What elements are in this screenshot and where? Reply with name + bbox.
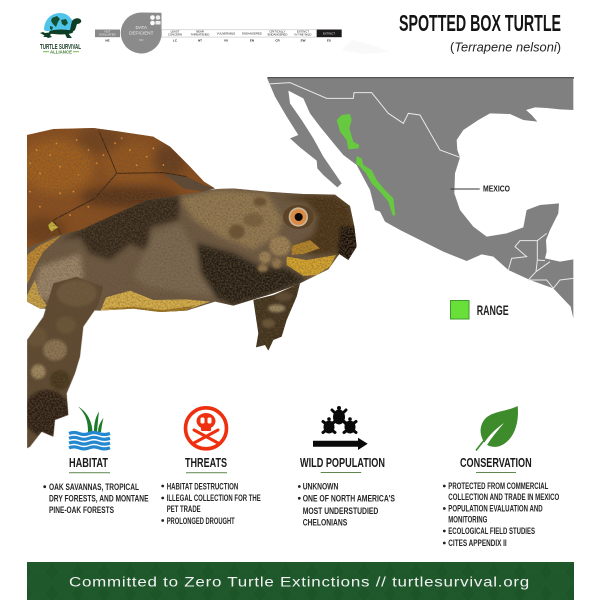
habitat text: PINE-OAK FORESTS [49, 505, 114, 515]
label: Mexico: MEXICO [483, 184, 510, 194]
conservation text: ECOLOGICAL FIELD STUDIES [448, 526, 535, 536]
wild population text: MOST UNDERSTUDIED [303, 506, 379, 516]
heading: HABITAT [69, 455, 108, 470]
status codes: EX [327, 38, 331, 42]
shell [27, 128, 215, 248]
habitat text [43, 482, 148, 515]
footer banner [27, 562, 574, 600]
status: data deficient circle: DEFICIENT [129, 30, 154, 36]
wild population text [298, 482, 395, 528]
threats text [161, 482, 261, 526]
land [267, 79, 573, 318]
heading: CONSERVATION [460, 455, 532, 470]
status codes: VU [224, 38, 228, 42]
icon: turtle with globe shell [40, 13, 81, 38]
habitat text: OAK SAVANNAS, TROPICAL [49, 482, 139, 492]
threats text: PET TRADE [167, 504, 201, 514]
status bar [95, 30, 342, 37]
status: data deficient circle [121, 12, 162, 53]
wild population text: UNKNOWN [303, 482, 338, 492]
status codes: CR [275, 38, 280, 42]
habitat text: DRY FORESTS, AND MONTANE [49, 494, 148, 504]
footer banner: Committed to Zero Turtle Extinctions // turtlesurvival.org [69, 574, 530, 590]
conservation text: PROTECTED FROM COMMERCIAL [448, 481, 549, 491]
yellow jaw [287, 255, 336, 276]
status labels: NEAR [196, 30, 204, 34]
status codes: LC [173, 38, 178, 42]
icon: skull and crossbones [186, 408, 226, 449]
neck scale blobs [229, 197, 291, 272]
plastron [100, 291, 210, 313]
status codes [105, 38, 331, 42]
conservation text: MONITORING [448, 514, 487, 524]
IUCN conservation status scale [95, 12, 342, 53]
status labels: EXTINCT [297, 30, 309, 34]
conservation text: POPULATION EVALUATION AND [448, 504, 543, 514]
status: data deficient circle: DD [139, 38, 144, 42]
scientific name: (Terrapene nelsoni) [450, 40, 561, 54]
shell scute lines [53, 130, 187, 235]
turtle photo illustration [20, 120, 370, 450]
status labels: IN THE WILD [295, 33, 311, 37]
icon: turtles and arrow [313, 406, 368, 450]
status labels: THREATENED [191, 33, 209, 37]
label: Mexico [451, 184, 510, 194]
legend: range: RANGE [477, 302, 509, 318]
turtle eye [283, 205, 314, 229]
section: habitat [43, 406, 148, 515]
status codes: NT [198, 38, 202, 42]
status labels: NOT [105, 30, 111, 34]
beak [338, 227, 357, 261]
status codes: EN [250, 38, 254, 42]
status codes: NE [105, 38, 110, 42]
logo: Turtle Survival Alliance [40, 13, 81, 54]
shell spots [29, 137, 164, 216]
wild population text: ONE OF NORTH AMERICA'S [303, 493, 395, 503]
section: wild population [298, 406, 395, 528]
threats text: ILLEGAL COLLECTION FOR THE [167, 493, 261, 503]
conservation text [443, 481, 559, 548]
icon: leaf [476, 406, 518, 450]
status labels [99, 30, 335, 37]
status labels: VULNERABLE [217, 32, 235, 36]
heading: WILD POPULATION [300, 455, 385, 470]
status labels: LEAST [171, 30, 180, 34]
logo wordmark: TURTLE SURVIVAL [40, 42, 81, 51]
turtle body, neck and head [27, 188, 357, 312]
large front leg [27, 276, 103, 448]
small front leg [254, 284, 300, 350]
status labels: EVALUATED [99, 33, 116, 37]
top rule [267, 77, 574, 79]
status labels: CRITICALLY [270, 30, 286, 34]
country borders [267, 83, 573, 288]
range: spotted box turtle [337, 114, 395, 215]
status labels: CONCERN [168, 33, 182, 37]
legend: range [450, 300, 509, 319]
icon: grass and water [69, 406, 110, 449]
section: conservation [443, 406, 559, 548]
threats text: PROLONGED DROUGHT [167, 516, 235, 526]
logo sub-wordmark: ALLIANCE [50, 50, 72, 54]
status labels: EXTINCT [323, 32, 335, 36]
threats text: HABITAT DESTRUCTION [167, 482, 238, 492]
status labels: ENDANGERED [268, 33, 287, 37]
faint speckle near map edge [342, 40, 390, 54]
shell yellow rim [27, 235, 62, 285]
status codes: EW [301, 38, 306, 42]
status labels: ENDANGERED [242, 32, 262, 36]
conservation text: CITES APPENDIX II [448, 538, 507, 548]
map: Mexico and Central America [267, 77, 574, 318]
status: data deficient circle: DATA [136, 25, 148, 30]
wild population text: CHELONIANS [303, 518, 347, 528]
section: threats [161, 408, 261, 526]
heading: THREATS [185, 455, 227, 470]
